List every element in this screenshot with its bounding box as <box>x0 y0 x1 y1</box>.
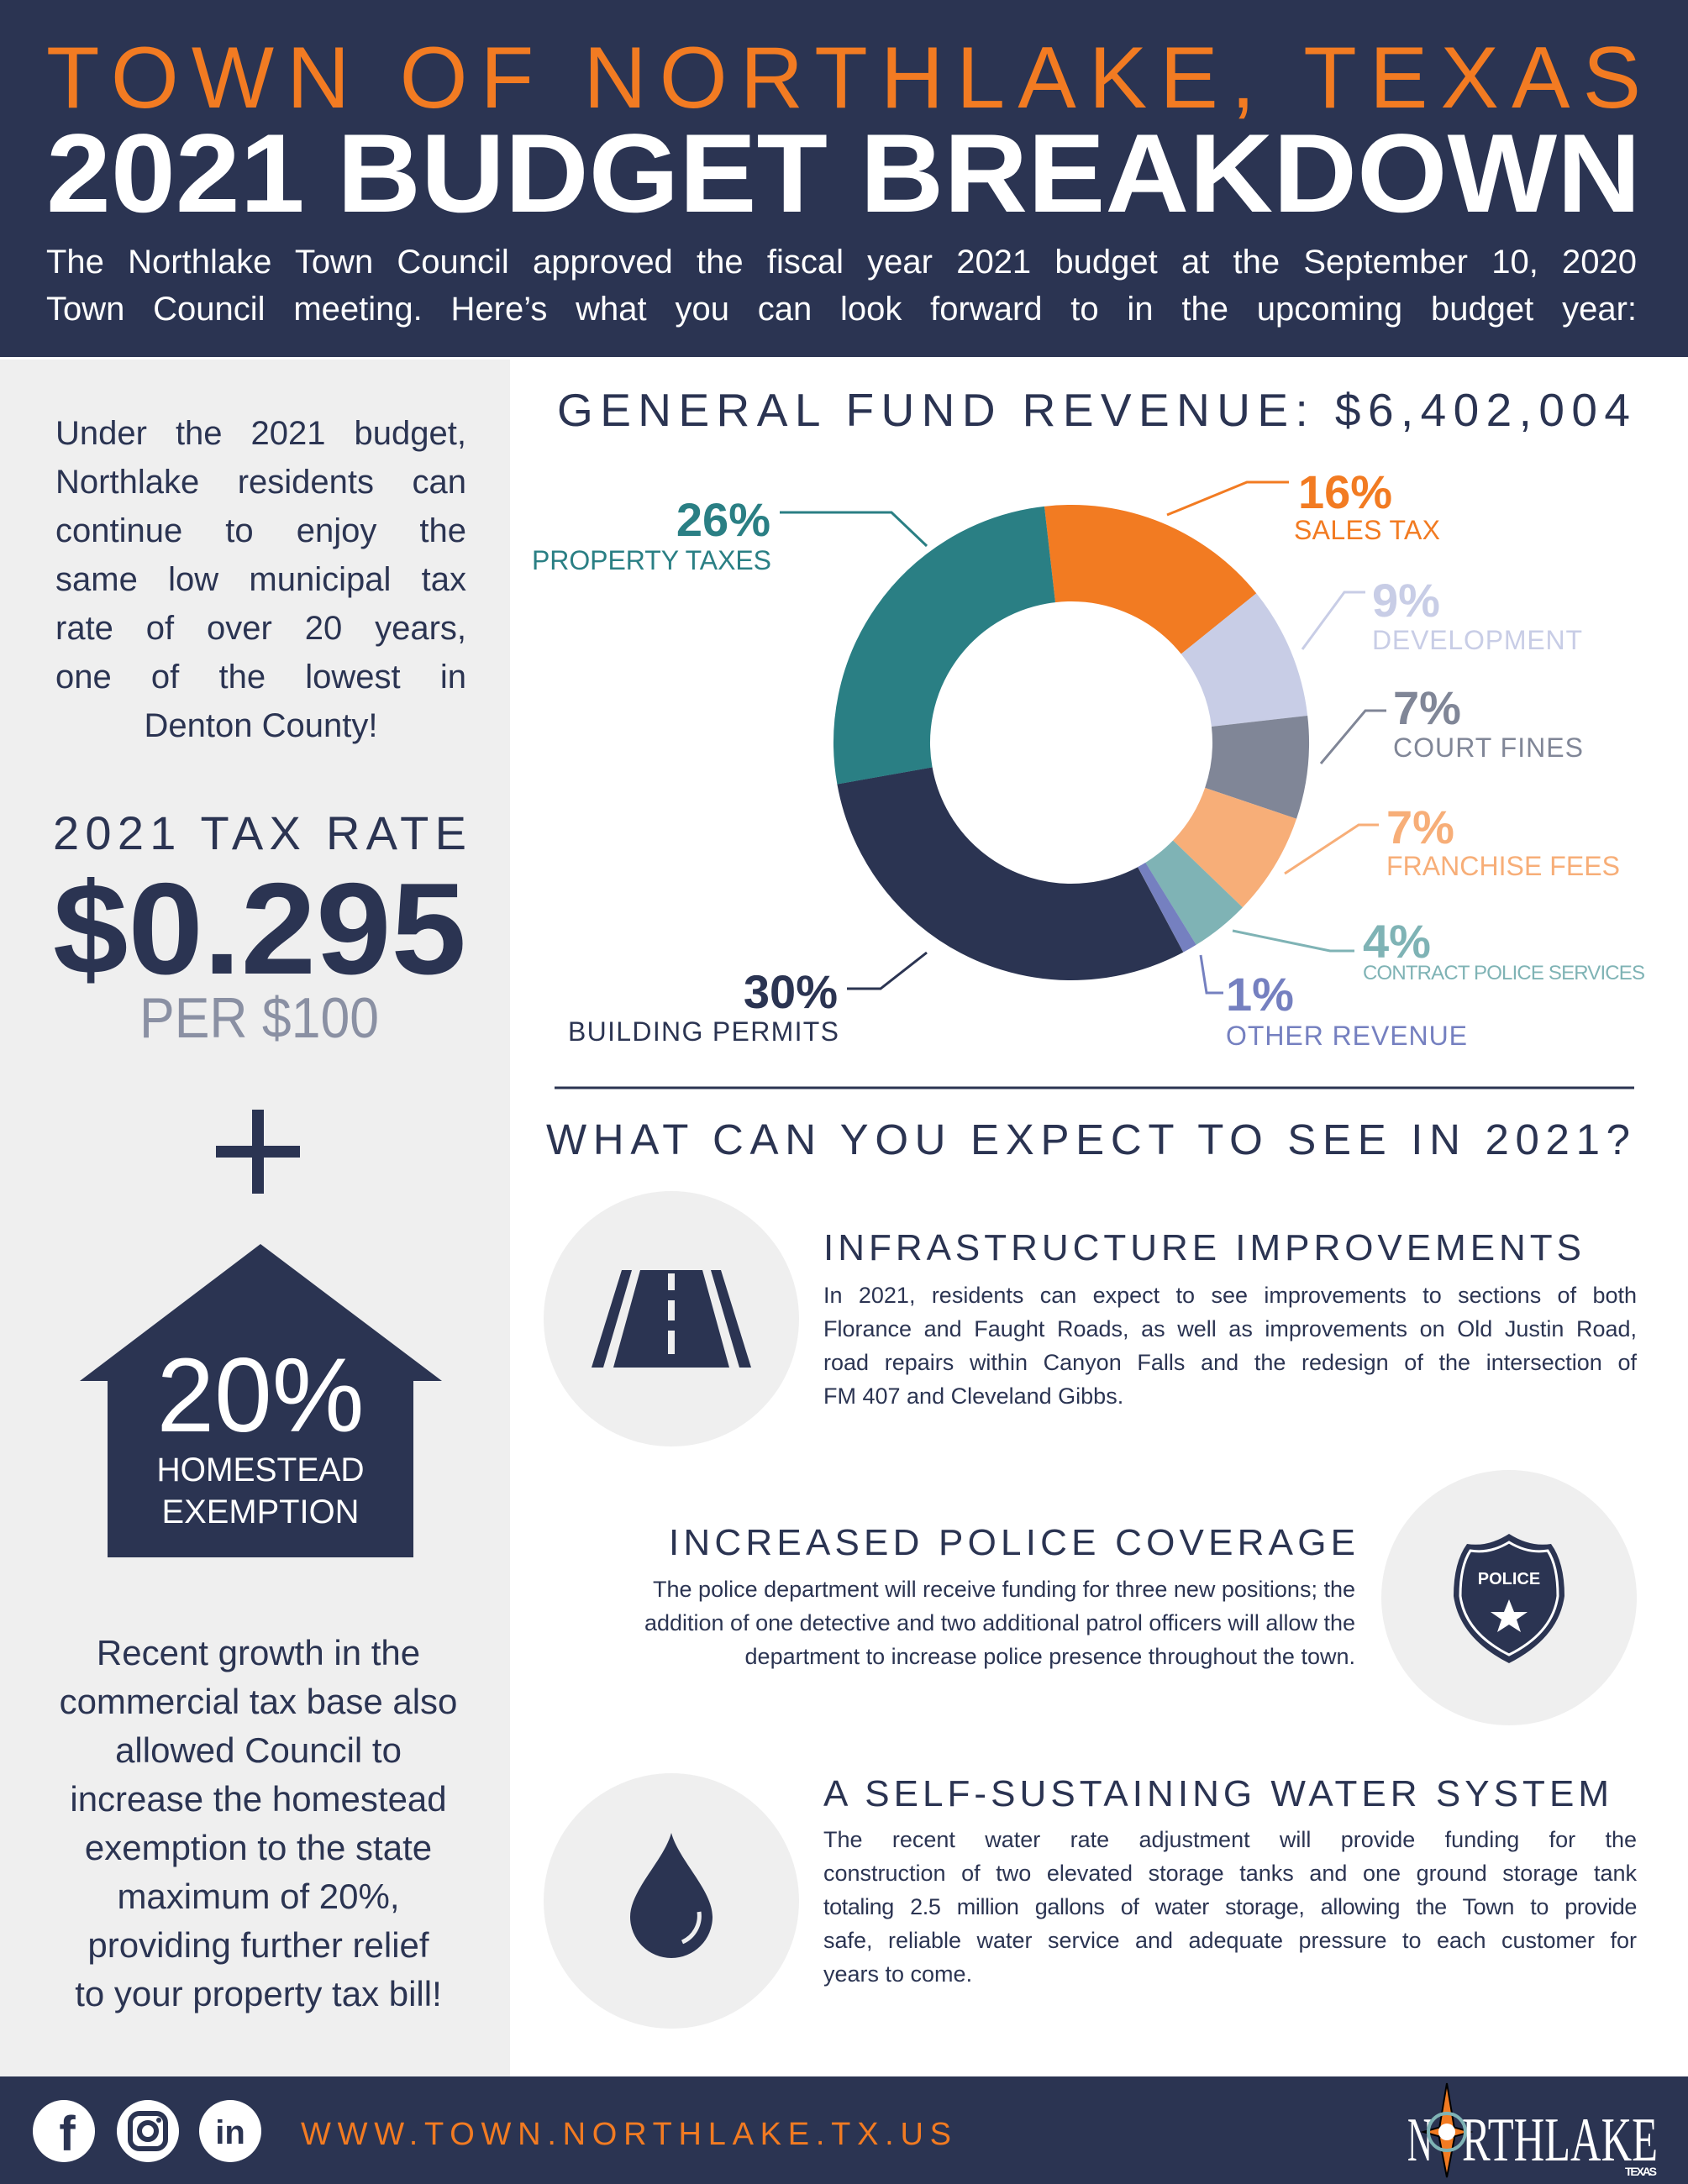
label: property taxes: 26% <box>676 493 770 546</box>
per 100: PER $100 <box>139 986 379 1050</box>
title line 1: TOWN OF NORTHLAKE, TEXAS <box>46 29 1641 127</box>
label: sales tax <box>1167 465 1440 545</box>
label: court fines <box>1321 681 1583 764</box>
subtitle: Town Council meeting. Here’s what you can look forward to in the upcoming budget year: <box>46 291 1637 328</box>
left bottom text: allowed Council to <box>115 1730 402 1770</box>
infrastructure text: road repairs within Canyon Falls and the redesign of the intersection of <box>823 1350 1637 1375</box>
label: development: DEVELOPMENT <box>1372 625 1582 655</box>
label: contract police services <box>1233 915 1645 984</box>
label: other revenue: 1% <box>1226 968 1294 1021</box>
house: homestead exemption: 20% <box>156 1337 365 1454</box>
heading: police: INCREASED POLICE COVERAGE <box>669 1522 1355 1563</box>
label: court fines: COURT FINES <box>1393 732 1583 763</box>
infrastructure text: FM 407 and Cleveland Gibbs. <box>823 1383 1123 1409</box>
icon: police badge: POLICE <box>1478 1570 1540 1588</box>
icon: instagram <box>117 2100 179 2162</box>
left panel background <box>0 360 510 2076</box>
logo: Northlake Texas <box>1407 2083 1658 2178</box>
label: property taxes: PROPERTY TAXES <box>532 545 771 575</box>
website url: WWW.TOWN.NORTHLAKE.TX.US <box>301 2117 951 2152</box>
subtitle: The Northlake Town Council approved the fiscal year 2021 budget at the September 10, 2020 <box>46 244 1637 281</box>
water text: totaling 2.5 million gallons of water storage, allowing the Town to provide <box>823 1894 1637 1919</box>
left intro text: Northlake residents can <box>55 464 466 501</box>
label: development: 9% <box>1372 574 1440 627</box>
heading: water: A SELF-SUSTAINING WATER SYSTEM <box>823 1773 1609 1814</box>
police text: department to increase police presence throughout the town. <box>745 1644 1355 1669</box>
water text: construction of two elevated storage tanks and one ground storage tank <box>823 1861 1637 1886</box>
house: homestead exemption <box>80 1244 442 1557</box>
police text: addition of one detective and two additional patrol officers will allow the <box>644 1610 1355 1635</box>
tax rate value: $0.295 <box>53 856 466 1001</box>
left bottom text: maximum of 20%, <box>117 1877 400 1916</box>
label: sales tax: SALES TAX <box>1294 515 1440 545</box>
left intro text: one of the lowest in <box>55 659 466 696</box>
section heading: what to expect: WHAT CAN YOU EXPECT TO SEE IN 2021? <box>546 1116 1630 1163</box>
left bottom text: to your property tax bill! <box>75 1974 442 2013</box>
label: franchise fees: FRANCHISE FEES <box>1386 851 1620 881</box>
label: building permits: 30% <box>744 965 838 1018</box>
police text <box>644 1577 1355 1669</box>
water text <box>823 1827 1637 1987</box>
infrastructure text <box>823 1283 1637 1409</box>
left intro text: continue to enjoy the <box>55 512 466 549</box>
icon: facebook <box>33 2100 95 2162</box>
left bottom text <box>60 1633 457 2013</box>
water text: years to come. <box>823 1961 972 1987</box>
label: building permits: BUILDING PERMITS <box>568 1016 839 1047</box>
footer background <box>0 2076 1688 2184</box>
label: franchise fees: 7% <box>1386 801 1454 853</box>
logo: Northlake Texas: N <box>1407 2106 1433 2175</box>
tax rate heading: 2021 TAX RATE <box>53 806 466 859</box>
icon: road <box>544 1191 799 1446</box>
plus sign <box>216 1110 300 1194</box>
heading: infrastructure: INFRASTRUCTURE IMPROVEMENTS <box>823 1227 1581 1268</box>
icon: linkedin: in <box>215 2114 245 2151</box>
title line 2: 2021 BUDGET BREAKDOWN <box>46 112 1641 236</box>
left bottom text: commercial tax base also <box>60 1682 457 1721</box>
label: property taxes <box>532 493 927 575</box>
left bottom text: providing further relief <box>87 1925 429 1965</box>
left intro text: same low municipal tax <box>55 561 466 598</box>
header background <box>0 0 1688 357</box>
water text: safe, reliable water service and adequate pressure to each customer for <box>823 1928 1637 1953</box>
icon: linkedin <box>199 2100 261 2162</box>
label: building permits <box>568 953 927 1047</box>
label: court fines: 7% <box>1393 681 1461 734</box>
water text: The recent water rate adjustment will provide funding for the <box>823 1827 1637 1852</box>
house: homestead exemption: HOMESTEAD <box>156 1452 365 1488</box>
infrastructure text: In 2021, residents can expect to see improvements to sections of both <box>823 1283 1637 1308</box>
police text: The police department will receive funding for three new positions; the <box>653 1577 1355 1602</box>
label: sales tax: 16% <box>1298 465 1392 518</box>
label: contract police services: CONTRACT POLICE SERVICES <box>1363 962 1645 984</box>
general fund heading: GENERAL FUND REVENUE: $6,402,004 <box>557 384 1630 436</box>
left bottom text: Recent growth in the <box>97 1633 420 1672</box>
label: other revenue: OTHER REVENUE <box>1226 1021 1467 1051</box>
left bottom text: increase the homestead <box>70 1779 447 1819</box>
icon: facebook: f <box>59 2107 76 2161</box>
left intro text: Under the 2021 budget, <box>55 415 466 452</box>
infrastructure text: Florance and Faught Roads, as well as improvements on Old Justin Road, <box>823 1316 1637 1341</box>
label: other revenue <box>1201 955 1467 1051</box>
house: homestead exemption: EXEMPTION <box>161 1494 360 1530</box>
icon: police badge <box>1381 1470 1637 1725</box>
left intro text: rate of over 20 years, <box>55 610 466 647</box>
logo: Northlake Texas: TEXAS <box>1625 2165 1657 2178</box>
subtitle <box>46 244 1637 328</box>
left bottom text: exemption to the state <box>85 1828 432 1867</box>
left intro text: Denton County! <box>145 707 377 744</box>
label: development <box>1302 574 1582 655</box>
donut chart <box>803 475 1339 1011</box>
label: franchise fees <box>1285 801 1620 881</box>
icon: water drop <box>544 1773 799 2029</box>
left intro text <box>55 415 466 744</box>
label: contract police services: 4% <box>1363 915 1431 968</box>
